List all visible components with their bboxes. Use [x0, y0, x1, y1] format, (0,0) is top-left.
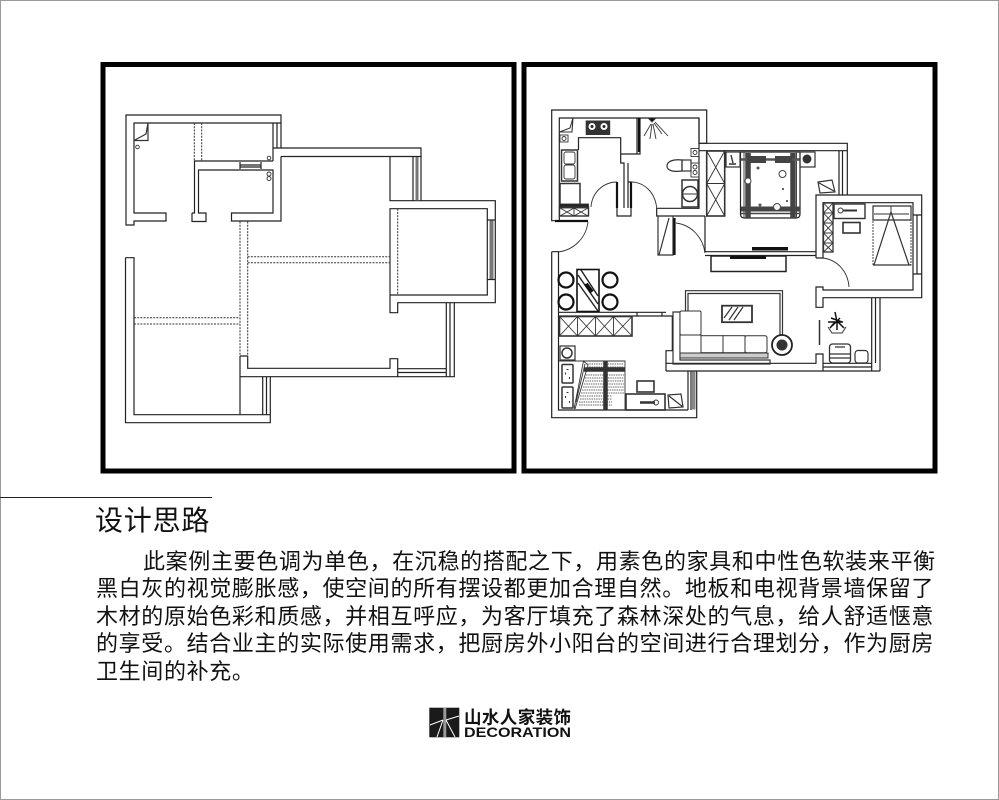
panel: furnished floor plan — [524, 64, 935, 471]
TV cabinet and TV — [711, 247, 788, 272]
icon: master bed — [740, 152, 800, 218]
icon: dining table and chairs — [558, 270, 618, 312]
lower bedroom furniture — [559, 346, 683, 410]
icon: plant and lounge chair — [820, 312, 868, 363]
text block: design description: 卫生间的补充。 — [96, 659, 255, 684]
icon: shower — [644, 118, 668, 139]
window shading — [692, 372, 696, 410]
icon: logo mark — [429, 708, 459, 737]
text block: design description: 此案例主要色调为单色，在沉稳的搭配之下，用素色的家具和中性色软装来平衡 — [143, 549, 936, 574]
walls: master bedroom and second bedroom — [666, 151, 922, 371]
cabinet with cross marks — [560, 316, 632, 336]
kitchen wall thickening — [555, 118, 639, 221]
wardrobe and bedside tables — [707, 151, 835, 216]
walls: kitchen and bathroom — [552, 110, 847, 221]
panel: original floor plan — [103, 64, 514, 471]
text block: design description — [96, 549, 936, 684]
logo wordmark Chinese: 山水人家装饰 — [464, 708, 571, 728]
text block: design description: 黑白灰的视觉膨胀感，使空间的所有摆设都更加合理自然。地板和电视背景墙保留了 — [96, 576, 934, 601]
rug and coffee table — [686, 291, 782, 335]
heading: design concept: 设计思路 — [95, 505, 210, 536]
walls: living area and bay — [240, 156, 495, 415]
walls: left side and lower bedroom — [552, 252, 697, 418]
dashed beam lines — [134, 123, 398, 356]
second bedroom furniture — [824, 203, 911, 265]
logo: Shanshui Renjia Decoration — [429, 708, 571, 740]
divider line above heading — [0, 496, 212, 498]
door mark and fittings — [134, 123, 271, 180]
walls: upper kitchen and bathroom block — [126, 115, 421, 225]
walls: lower left room — [126, 258, 270, 423]
hall closet — [658, 216, 674, 255]
text block: design description: 木材的原始色彩和质感，并相互呼应，为客厅填充了森林深处的气息，给人舒适惬意 — [96, 604, 934, 629]
icon: gas stove — [586, 120, 610, 135]
bay window fill — [416, 157, 494, 279]
icon: kitchen fittings — [560, 118, 588, 216]
door arcs: kitchen, bathroom, entry, bedrooms — [558, 182, 849, 287]
icon: round side table — [772, 335, 792, 355]
icon: sofa — [673, 311, 770, 364]
icon: toilet, basin and valves — [667, 148, 699, 207]
logo wordmark English: DECORATION — [464, 724, 571, 740]
text block: design description: 的享受。结合业主的实际使用需求，把厨房外小阳台的空间进行合理划分，作为厨房 — [96, 631, 934, 656]
